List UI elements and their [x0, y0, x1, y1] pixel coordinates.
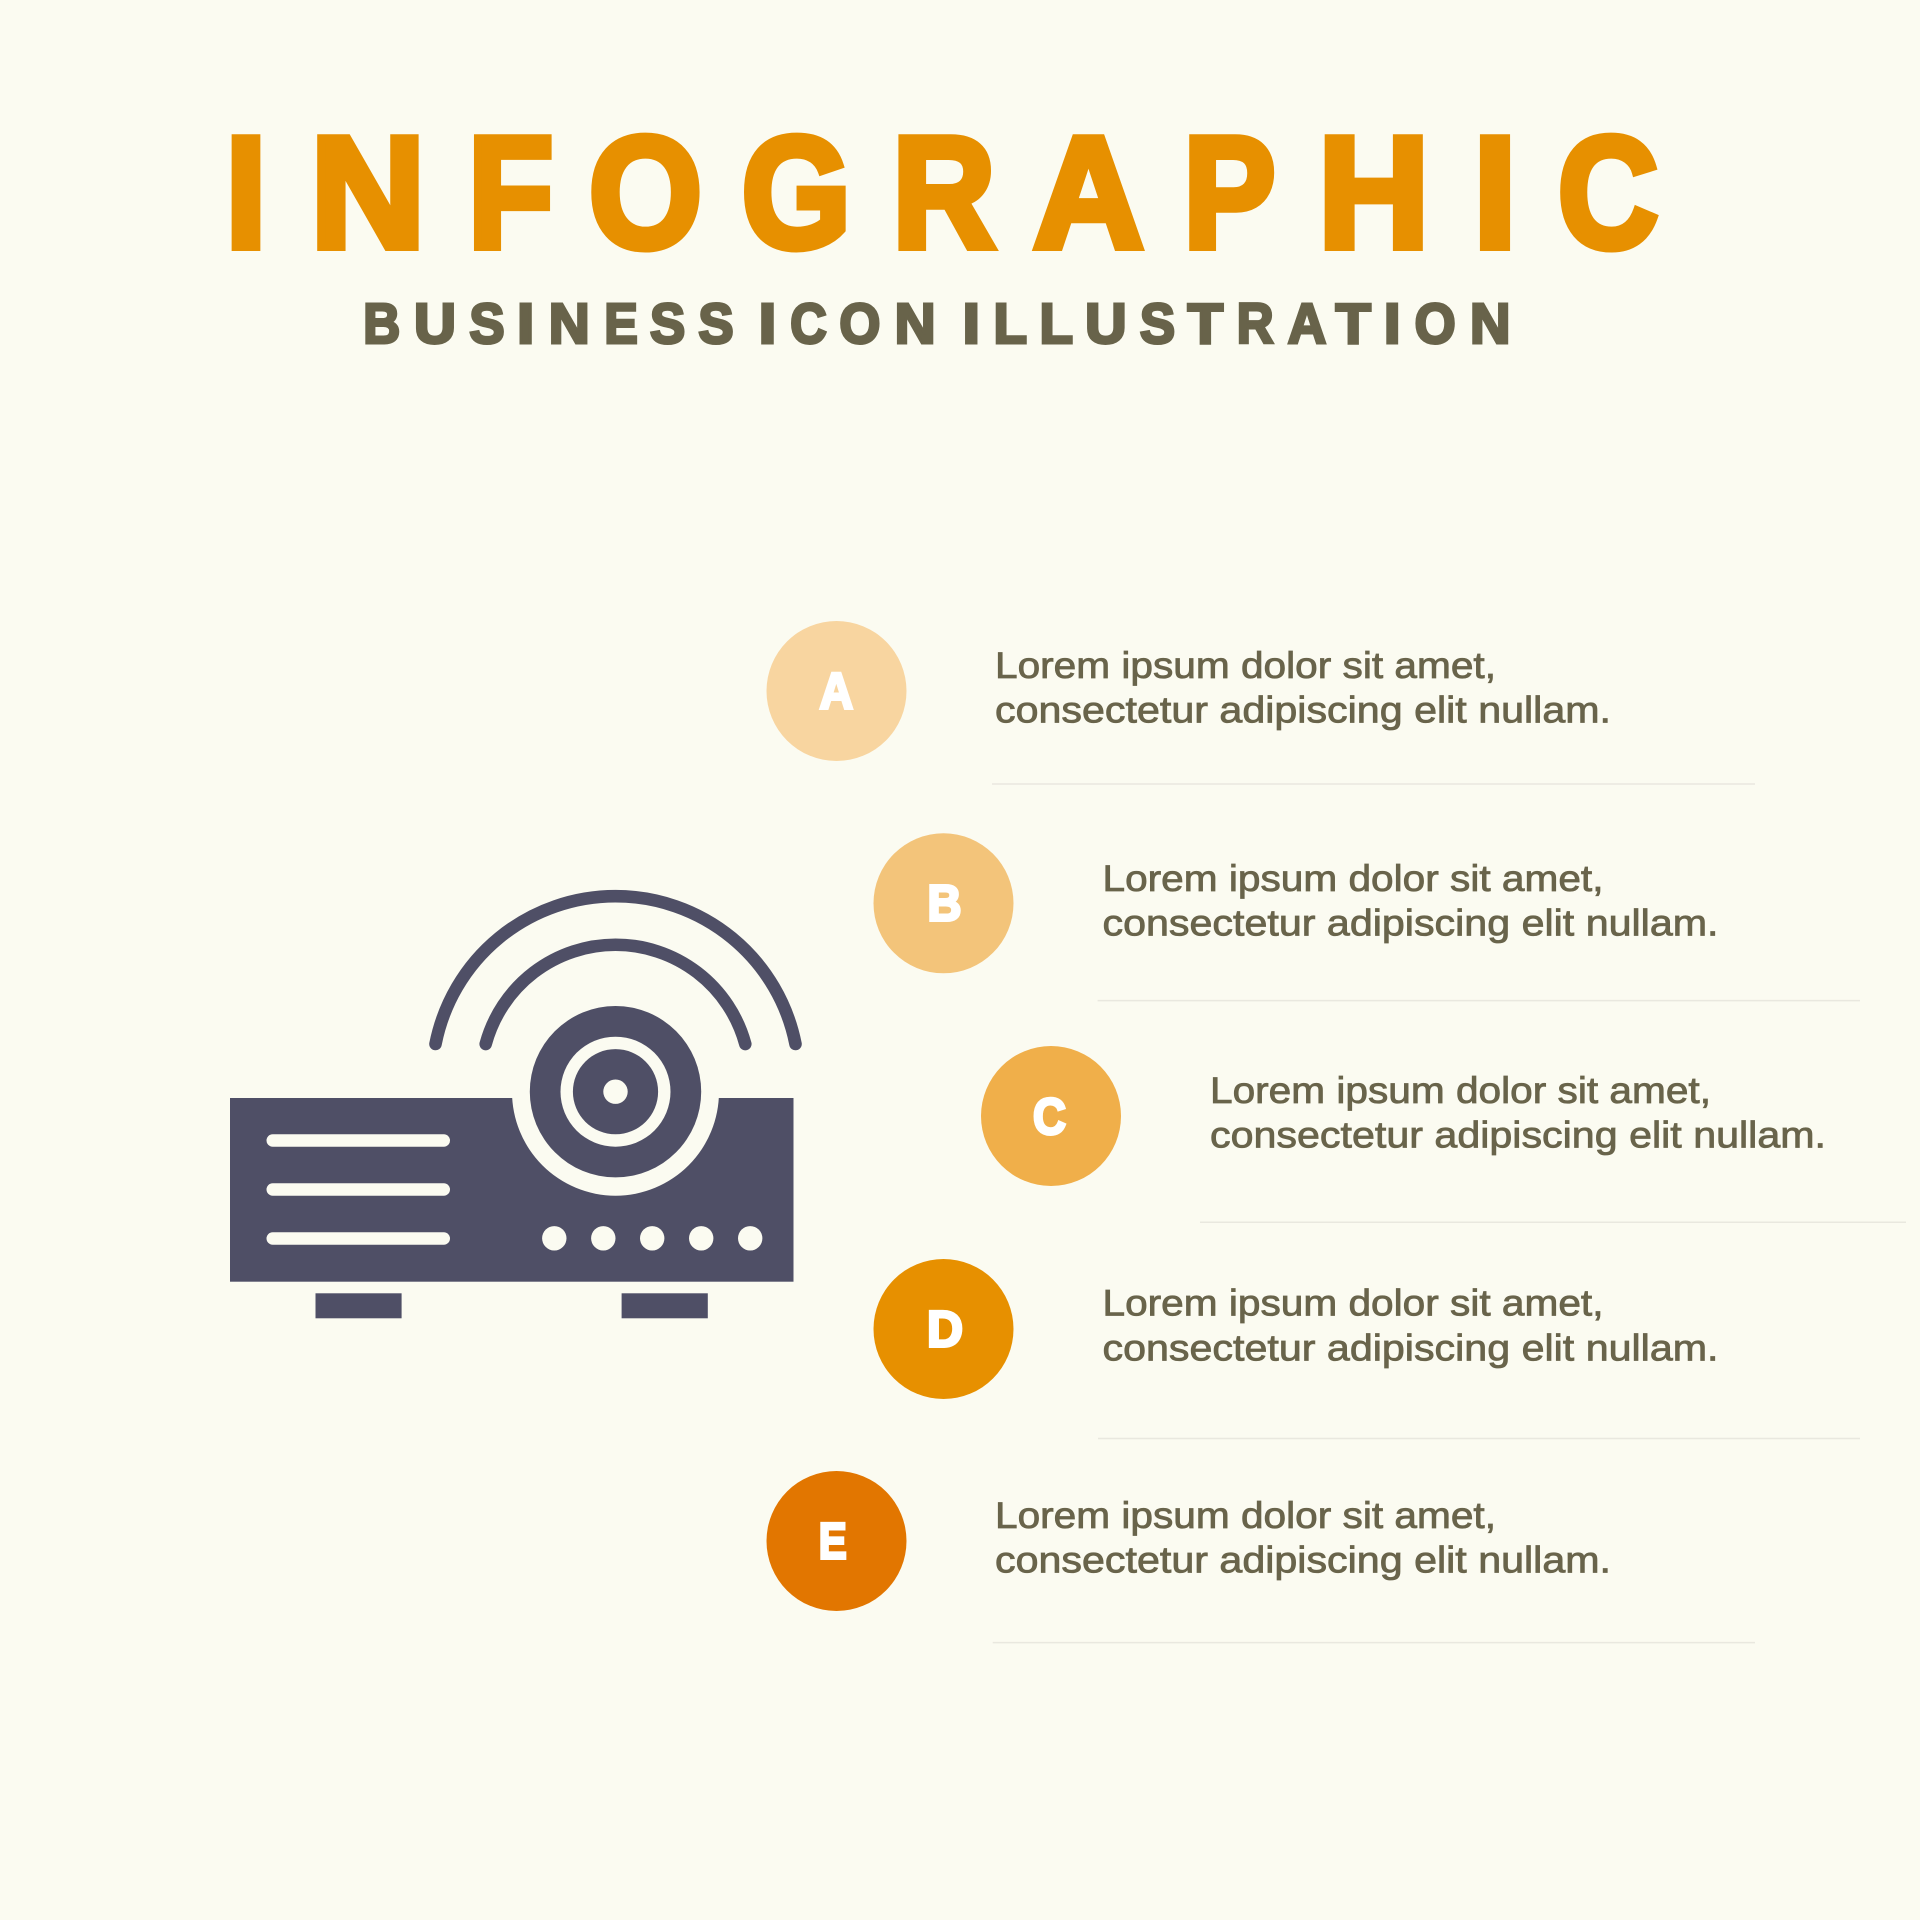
- title: H: [1318, 105, 1429, 281]
- subtitle: S: [469, 293, 505, 356]
- title: A: [1034, 105, 1144, 281]
- badge D: [874, 1259, 1014, 1399]
- subtitle: L: [994, 293, 1027, 356]
- title: O: [589, 105, 702, 281]
- item A: [766, 621, 1755, 784]
- title: F: [468, 105, 553, 281]
- subtitle: T: [1188, 293, 1224, 356]
- text A: Lorem ipsum dolor sit amet,: [995, 645, 1496, 686]
- subtitle: L: [1040, 293, 1073, 356]
- subtitle: I: [962, 293, 980, 356]
- text A: [995, 645, 1611, 731]
- text B: consectetur adipiscing elit nullam.: [1102, 903, 1718, 944]
- badge E: E: [819, 1512, 847, 1570]
- subtitle: I: [1384, 293, 1401, 356]
- badge D: D: [927, 1300, 963, 1358]
- panel lines: [266, 1134, 450, 1245]
- title: [226, 105, 1658, 281]
- subtitle: [363, 293, 1510, 356]
- projector body: [230, 1098, 794, 1282]
- badge A: A: [820, 662, 853, 720]
- subtitle: N: [1470, 293, 1510, 356]
- subtitle: N: [549, 293, 590, 356]
- signal arcs: [436, 896, 796, 1044]
- item B: [874, 833, 1860, 1001]
- icon: projector: [230, 896, 796, 1318]
- text D: [1102, 1283, 1718, 1368]
- subtitle: E: [604, 293, 638, 356]
- subtitle: U: [1085, 293, 1127, 356]
- subtitle: A: [1288, 293, 1326, 356]
- text B: [1102, 858, 1718, 944]
- subtitle: O: [839, 293, 880, 356]
- badge B: B: [928, 874, 962, 932]
- text C: [1210, 1070, 1826, 1156]
- text E: consectetur adipiscing elit nullam.: [995, 1540, 1611, 1581]
- subtitle: S: [1140, 293, 1175, 356]
- text E: [995, 1495, 1611, 1581]
- subtitle: S: [650, 293, 685, 356]
- title: I: [1474, 105, 1516, 281]
- badge E: [766, 1471, 906, 1611]
- projector feet: [316, 1293, 708, 1318]
- text D: consectetur adipiscing elit nullam.: [1102, 1327, 1718, 1368]
- title: C: [1558, 105, 1658, 281]
- badge C: C: [1033, 1088, 1066, 1145]
- item C: [981, 1046, 1906, 1222]
- title: R: [892, 105, 995, 281]
- text B: Lorem ipsum dolor sit amet,: [1102, 858, 1604, 899]
- lens cutout: [512, 1092, 719, 1196]
- item E: [766, 1471, 1755, 1643]
- subtitle: R: [1237, 293, 1274, 356]
- subtitle: B: [363, 293, 400, 356]
- title: P: [1184, 105, 1275, 281]
- subtitle: I: [759, 293, 776, 356]
- badge A: [766, 621, 906, 761]
- panel buttons: [542, 1226, 762, 1251]
- subtitle: S: [698, 293, 734, 356]
- lens: [530, 1006, 701, 1177]
- item D: [874, 1259, 1860, 1438]
- subtitle: U: [414, 293, 456, 356]
- title: G: [742, 105, 851, 281]
- subtitle: T: [1336, 293, 1371, 356]
- title: I: [226, 105, 266, 281]
- text E: Lorem ipsum dolor sit amet,: [995, 1495, 1496, 1536]
- badge B: [874, 833, 1014, 973]
- subtitle: I: [517, 293, 534, 356]
- text C: consectetur adipiscing elit nullam.: [1210, 1115, 1826, 1156]
- text A: consectetur adipiscing elit nullam.: [995, 690, 1611, 731]
- text C: Lorem ipsum dolor sit amet,: [1210, 1070, 1711, 1111]
- subtitle: O: [1415, 293, 1456, 356]
- subtitle: N: [895, 293, 936, 356]
- badge C: [981, 1046, 1121, 1186]
- subtitle: C: [790, 293, 827, 356]
- text D: Lorem ipsum dolor sit amet,: [1102, 1283, 1604, 1324]
- title: N: [311, 105, 425, 281]
